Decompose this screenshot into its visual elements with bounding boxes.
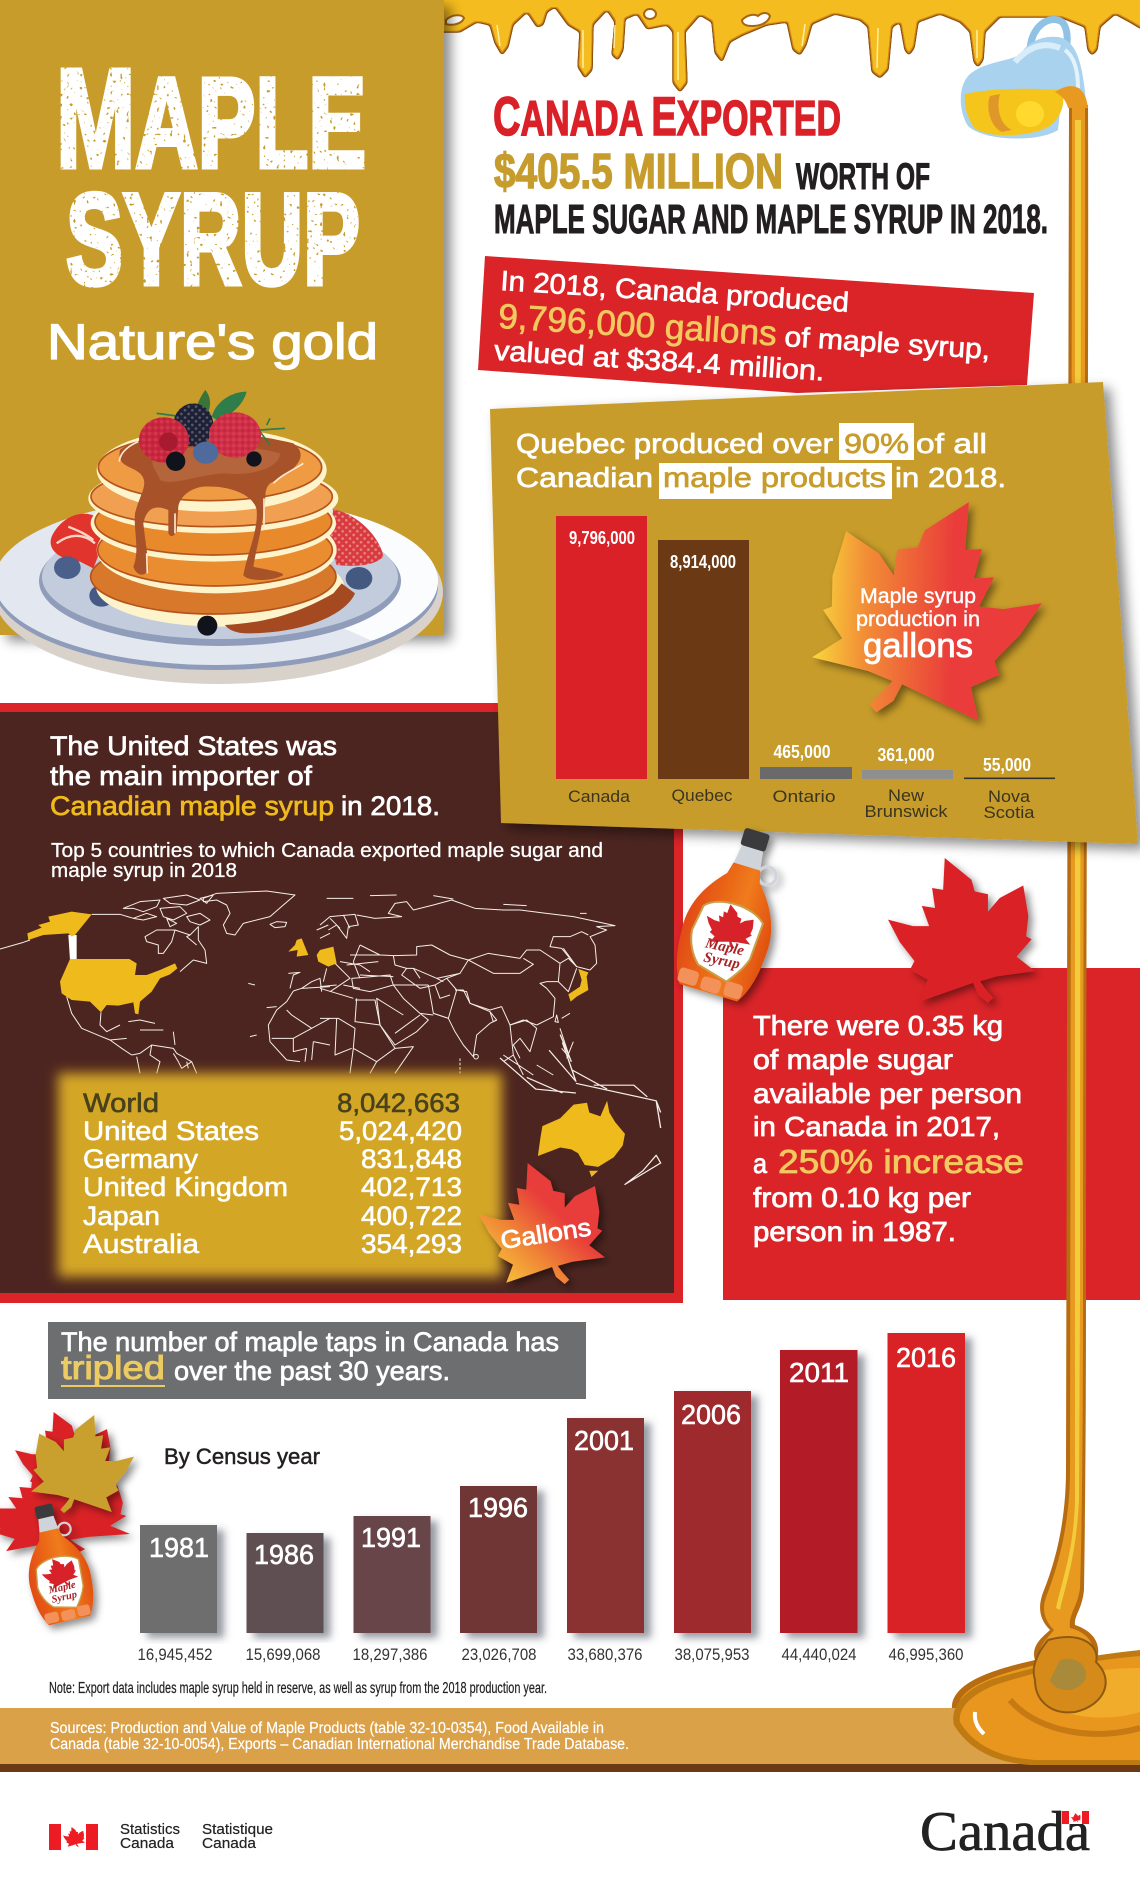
subtitle: Nature's gold: Nature's gold [47,314,378,370]
row: World: World [83,1088,159,1118]
illustration: syrup stream and pool [952,105,1140,1763]
bar: 2016: 2016 [896,1342,956,1373]
bar: Quebec: Quebec [672,786,733,805]
bar: Nova Scotia: 55,000 [983,755,1031,775]
bar: 1996: 1996 [468,1492,528,1523]
heading: maple sugar per person: of maple sugar [753,1044,953,1075]
rows: countries: 400,722 [361,1201,462,1231]
bar: 2006: 2006 [681,1399,741,1430]
bar: Quebec: 8,914,000 [670,552,736,572]
illustration: leaves and syrup bottle: Syrup [51,1589,78,1606]
heading: exports: WORTH OF [796,156,930,197]
bar: Nova Scotia: Nova [988,787,1031,806]
rows: countries: 354,293 [361,1229,462,1259]
title: Maple: MAPLE [56,39,366,197]
title: Syrup: SYRUP [66,166,360,312]
text: note: Note: Export data includes maple syrup held in reserve, as well as syrup from the 2018 production year. [49,1680,547,1697]
bar: Canada: Canada [568,787,631,806]
bar: 1996: 23,026,708 [462,1645,536,1664]
bar: New Brunswick: Brunswick [864,802,948,821]
heading: maple sugar per person: in Canada in 2017, [753,1111,1000,1142]
icon: red maple leaf [888,858,1035,1003]
bar: Ontario: 465,000 [774,742,830,762]
table: top export destinations [58,1073,502,1277]
heading: maple taps: The number of maple taps in Canada has [61,1327,559,1357]
text: 2018 production: In 2018, Canada produced [500,265,850,318]
icon: gallons leaf [479,1163,605,1284]
illustration: pouring pitcher [961,20,1088,139]
panel: sources band [0,1708,1140,1772]
logo: Statistics Canada [49,1821,273,1852]
heading: maple sugar per person: There were 0.35 kg [753,1010,1003,1041]
heading: maple taps [48,1322,586,1399]
text: map subtitle: Top 5 countries to which Canada exported maple sugar and [51,840,603,862]
rows: countries: United States [83,1116,259,1146]
bar: Ontario: Ontario [772,787,836,806]
icon: syrup bottle: Syrup [702,949,742,973]
bar: Nova Scotia: Scotia [984,803,1035,822]
bar: 1981: 16,945,452 [138,1645,212,1664]
bar: Nova Scotia [964,755,1055,822]
bar: New Brunswick: 361,000 [878,745,934,765]
text: 2018 production: of maple syrup, [784,321,991,365]
icon: syrup bottle [666,818,800,1006]
text: 2018 production: 9,796,000 gallons [497,297,778,353]
icon: maple leaf legend: production in [856,608,980,631]
text: by census year: By Census year [164,1444,320,1469]
heading: Quebec share: Canadian [516,462,653,493]
heading: exports [493,85,1048,242]
bar: 2016: 46,995,360 [888,1645,964,1664]
logo: Statistics Canada: Statistics [120,1821,180,1838]
icon: maple leaf legend: gallons [863,627,973,665]
heading: main importer: The United States was [50,731,337,761]
heading: maple taps: over the past 30 years. [174,1356,450,1386]
bar: 1986: 1986 [254,1539,314,1570]
heading: main importer: in 2018. [341,791,440,821]
bar: 1981: 1981 [149,1532,209,1563]
world map [0,891,661,1184]
heading: Quebec share: Quebec produced over [516,428,833,459]
text: 2018 production [493,265,994,397]
panel: Quebec production chart [490,382,1138,844]
bar: 1991 [352,1516,430,1664]
heading: maple sugar per person: available per person [753,1078,1022,1109]
icon: maple leaf legend [806,488,1054,728]
heading: maple sugar per person: a [753,1148,767,1179]
icon: gallons leaf: Gallons [499,1213,593,1255]
logo: Statistics Canada: Statistique [202,1821,273,1838]
logo: Canada wordmark: Canada [920,1801,1090,1863]
bar: 1991: 1991 [361,1522,421,1553]
heading: maple sugar per person [753,1010,1024,1247]
bar: 2016 [888,1333,965,1664]
bar: 1996 [460,1486,537,1664]
panel: export destinations [0,703,683,1303]
text: map subtitle [51,840,603,882]
panel: production callout [478,256,1034,397]
heading: maple sugar per person: 250% increase [778,1143,1024,1180]
panel: maple sugar availability [723,968,1140,1300]
rows: countries: Germany [83,1144,199,1174]
bar: 2011: 44,440,024 [782,1645,856,1664]
rows: countries: 402,713 [361,1172,462,1202]
bar: 2001: 33,680,376 [568,1645,642,1664]
panel: title background [0,0,444,635]
bar: 1991: 18,297,386 [352,1645,428,1664]
logo: Statistics Canada: Canada [120,1835,175,1852]
illustration: leaves and syrup bottle [0,1412,134,1627]
bar: 1981 [138,1525,217,1664]
bar: 2006 [674,1391,751,1664]
heading: maple sugar per person: person in 1987. [753,1216,956,1247]
rows: countries: 5,024,420 [339,1116,462,1146]
text: 2018 production: valued at $384.4 million. [493,335,826,387]
honey drips along the top [425,0,1140,92]
bar chart: production in gallons [556,516,1055,822]
heading: main importer [50,731,440,821]
bar: 2011 [780,1350,858,1664]
logo: Statistics Canada: Canada [202,1835,257,1852]
illustration: syrup pool over band [953,1637,1140,1765]
bar: 2001: 2001 [574,1425,634,1456]
row: World: 8,042,663 [337,1088,460,1118]
text: sources [50,1720,629,1753]
bar: 2001 [567,1418,644,1664]
bar: 1986 [246,1533,324,1664]
text: sources: Canada (table 32-10-0054), Exports – Canadian International Merchandise Trade Database. [50,1736,629,1753]
rows: countries: United Kingdom [83,1172,288,1202]
bar: 2006: 38,075,953 [674,1645,750,1664]
bar chart: maple taps by census year [138,1333,965,1664]
bar: Canada: 9,796,000 [569,528,635,548]
rows: countries: Japan [83,1201,160,1231]
heading: Quebec share: 90% [844,428,909,459]
illustration: pancakes on a plate [0,390,450,684]
heading: maple sugar per person: from 0.10 kg per [753,1182,971,1213]
heading: Quebec share: maple products [663,462,886,493]
text: sources: Sources: Production and Value of Maple Products (table 32-10-0354), Food Available in [50,1720,604,1737]
rows: countries [83,1116,462,1259]
bar: 2011: 2011 [789,1357,849,1388]
heading: exports: $405.5 MILLION [494,145,783,199]
rows: countries: 831,848 [361,1144,462,1174]
rows: countries: Australia [83,1229,200,1259]
heading: Quebec share: of all [916,428,987,459]
heading: Quebec share: in 2018. [895,462,1006,493]
heading: main importer: Canadian maple syrup [50,791,334,821]
icon: syrup bottle: Maple [703,935,746,959]
heading: main importer: the main importer of [50,761,313,791]
bar: New Brunswick [862,745,953,821]
heading: exports: CANADA EXPORTED [493,85,841,147]
heading: Quebec share [516,423,1006,499]
illustration: leaves and syrup bottle: Maple [47,1580,77,1597]
bar: New Brunswick: New [888,786,925,805]
heading: maple taps: tripled [61,1349,165,1386]
row: World [83,1088,460,1118]
icon: maple leaf legend: Maple syrup [860,585,976,608]
bar: 1986: 15,699,068 [246,1645,320,1664]
bar: Canada [556,516,647,806]
text: map subtitle: maple syrup in 2018 [51,860,237,882]
bar: Quebec [658,540,749,805]
bar: Ontario [760,742,852,806]
